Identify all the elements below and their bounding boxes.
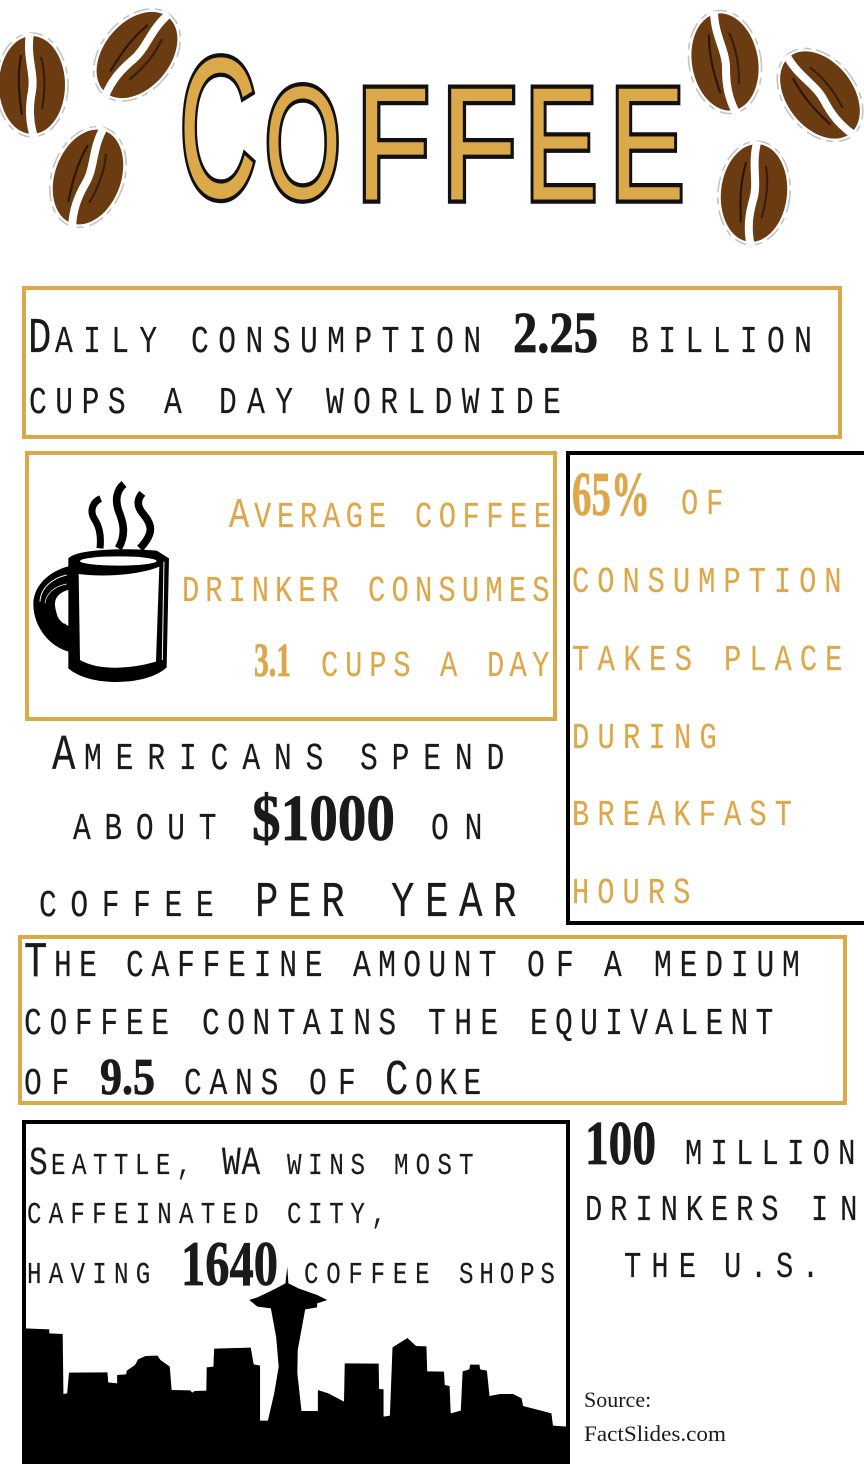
panel: daily consumption: WORLDWIDE — [326, 383, 561, 425]
title: O — [264, 53, 341, 232]
panel: average drinker: A — [440, 646, 458, 687]
illustration: Seattle skyline — [22, 1267, 570, 1464]
panel: seattle: WA — [222, 1141, 261, 1186]
number: 9.5: 9.5 — [100, 1049, 155, 1106]
text block: americans spend: YEAR — [391, 876, 517, 932]
text block: 100 million drinkers: U.S. — [724, 1247, 819, 1288]
title: E — [610, 54, 684, 234]
panel: average drinker: A — [229, 493, 249, 540]
icon: bean 6 — [713, 138, 795, 248]
text block: americans spend: MERICANS — [84, 739, 323, 781]
text block: 100 million drinkers — [585, 1110, 857, 1288]
text block: 100 million drinkers: IN — [811, 1190, 857, 1231]
panel: daily consumption — [24, 288, 840, 437]
panel: seattle: SHOPS — [459, 1258, 555, 1293]
text block: americans spend: SPEND — [360, 739, 504, 781]
text block: americans spend: PER — [255, 876, 345, 932]
title: E — [524, 54, 598, 234]
panel: caffeine amount: T — [24, 936, 47, 992]
panel: seattle — [22, 1122, 570, 1464]
icon: bean 1 — [0, 33, 68, 137]
panel: daily consumption: CONSUMPTION — [191, 322, 481, 364]
panel: caffeine amount: OKE — [415, 1064, 481, 1106]
text block: americans spend: ON — [431, 809, 482, 851]
panel: seattle: CITY, — [287, 1198, 386, 1233]
text block: 100 million drinkers: MILLION — [685, 1134, 855, 1175]
panel: seattle: S — [29, 1141, 48, 1186]
panel: seattle: EATTLE, — [51, 1149, 191, 1184]
text block: 100 million drinkers: THE — [624, 1247, 696, 1288]
text block: source: FactSlides.com — [584, 1421, 726, 1446]
icon: coffee mug — [33, 484, 169, 682]
panel: daily consumption: AILY — [55, 322, 157, 364]
panel: breakfast share: BREAKFAST — [572, 795, 792, 836]
panel: seattle: COFFEE — [304, 1258, 430, 1293]
text block: americans spend: A — [52, 729, 75, 785]
icon: coffee beans left group — [0, 0, 198, 238]
title: C — [179, 17, 257, 240]
panel: daily consumption: BILLION — [631, 322, 812, 364]
panel: average drinker: CUPS — [321, 646, 411, 687]
title — [179, 17, 684, 240]
panel: caffeine amount: MEDIUM — [654, 946, 800, 988]
icon: bean 4 — [681, 5, 769, 119]
panel: caffeine amount: THE — [428, 1004, 498, 1046]
icon: bean 2 — [76, 0, 198, 118]
text block: americans spend: ABOUT — [73, 809, 217, 851]
panel: caffeine amount: CAFFEINE — [126, 946, 323, 988]
panel: caffeine amount: OF — [527, 946, 574, 988]
panel: breakfast share: OF — [681, 484, 723, 525]
panel: breakfast share — [568, 453, 864, 923]
panel: average drinker: DAY — [487, 646, 549, 687]
panel: caffeine amount: AMOUNT — [353, 946, 497, 988]
title: F — [441, 54, 517, 234]
panel: daily consumption: D — [28, 312, 51, 368]
panel: average drinker: DRINKER — [182, 571, 339, 612]
panel: caffeine amount: A — [604, 946, 622, 988]
panel: daily consumption: CUPS — [29, 383, 126, 425]
panel: seattle: HAVING — [27, 1258, 150, 1293]
panel: daily consumption: DAY — [219, 383, 293, 425]
panel: seattle: CAFFEINATED — [27, 1198, 259, 1233]
panel: breakfast share: HOURS — [572, 873, 690, 914]
panel: caffeine amount: HE — [54, 946, 97, 988]
title: F — [356, 54, 430, 234]
panel: breakfast share: CONSUMPTION — [572, 562, 842, 603]
panel: breakfast share: PLACE — [724, 640, 842, 681]
text block: americans spend — [39, 729, 517, 932]
text block: 100 million drinkers: DRINKERS — [585, 1190, 779, 1231]
icon: coffee beans right group — [681, 5, 864, 248]
panel: average drinker — [27, 453, 555, 719]
icon: bean 3 — [36, 116, 140, 238]
text block: source — [584, 1387, 726, 1446]
panel: seattle: MOST — [394, 1149, 474, 1184]
text block: americans spend: COFFEE — [39, 886, 214, 928]
panel: caffeine amount: C — [385, 1054, 408, 1110]
panel: average drinker: VERAGE — [254, 497, 386, 538]
panel: caffeine amount: EQUIVALENT — [530, 1004, 773, 1046]
number: 2.25: 2.25 — [513, 300, 598, 365]
number: 3.1: 3.1 — [254, 634, 291, 687]
panel: daily consumption: A — [164, 383, 182, 425]
panel: breakfast share: DURING — [572, 718, 717, 759]
panel: breakfast share: TAKES — [572, 640, 692, 681]
panel: caffeine amount: CONTAINS — [202, 1004, 396, 1046]
panel: caffeine amount: OF — [309, 1064, 356, 1106]
panel: caffeine amount: CANS — [184, 1064, 278, 1106]
text block: source: Source: — [584, 1387, 651, 1412]
panel: seattle: WINS — [287, 1149, 365, 1184]
icon: bean 5 — [760, 32, 864, 158]
number: 65%: 65% — [572, 461, 650, 529]
panel: caffeine amount: OF — [24, 1064, 69, 1106]
panel: average drinker: COFFEE — [415, 497, 551, 538]
number: $1000: $1000 — [252, 782, 395, 855]
number: 1640: 1640 — [181, 1228, 278, 1299]
panel: caffeine amount: COFFEE — [24, 1004, 169, 1046]
panel: caffeine amount — [20, 936, 845, 1110]
number: 100: 100 — [585, 1110, 656, 1178]
panel: average drinker: CONSUMES — [368, 571, 550, 612]
